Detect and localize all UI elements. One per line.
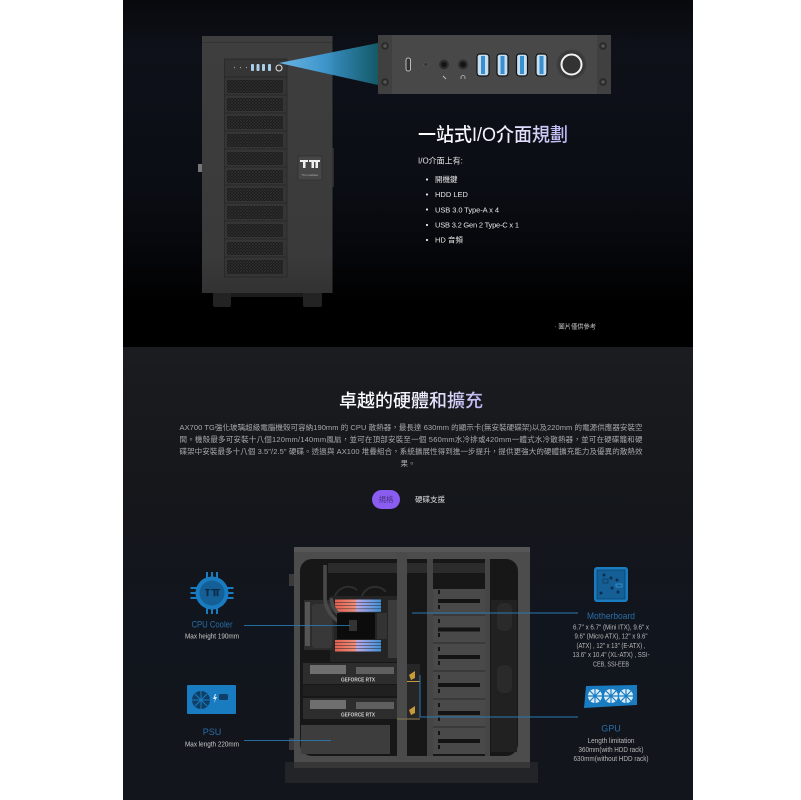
label: GPU specs: 360mm(with HDD rack) (578, 747, 644, 754)
text block: hardware description: 間。機殼最多可安裝十八個120mm/140mm風扇，並可在頂部安裝至一個 560mm水冷排或420mm一體式水冷散熱器，並可在硬碟籠和硬 (180, 434, 643, 444)
label: motherboard specs: CEB, SSI-EEB (593, 662, 629, 668)
heading: I/O section: 一站式I/O介面規劃 (418, 124, 568, 146)
icon: CPU cooler (190, 572, 234, 614)
label: PSU: PSU (203, 727, 221, 737)
coolant tubes (325, 565, 349, 628)
label: CPU cooler: CPU Cooler (192, 620, 233, 630)
text block: I/O list: I/O介面上有: (418, 156, 463, 166)
label: GPU specs: GPU (601, 724, 621, 734)
leader line: motherboard (412, 612, 578, 614)
text block: I/O list: HD 音頻 (435, 234, 463, 244)
label: GPU specs (574, 724, 648, 763)
label: PSU: Max length 220mm (185, 742, 239, 748)
I/O panel close-up (378, 35, 611, 94)
RAM bottom (335, 640, 381, 642)
label: GPU specs: Length limitation (588, 738, 635, 745)
icon: motherboard (594, 567, 628, 602)
HDD rack rails (427, 559, 433, 756)
case interior illustration (285, 547, 538, 783)
label: GPU specs: 630mm(without HDD rack) (574, 756, 648, 763)
label: PSU (185, 727, 239, 748)
icon: GPU (584, 685, 637, 708)
text block: I/O list: USB 3.0 Type-A x 4 (435, 206, 499, 214)
PSU (301, 725, 390, 754)
text block: I/O list: 開機鍵 (435, 174, 458, 184)
tab: specifications (active): 規格 (378, 494, 394, 504)
leader line: PSU (244, 740, 331, 742)
text block: I/O list: HDD LED (435, 190, 469, 199)
HDD sled stack (433, 589, 485, 754)
label: CPU cooler: Max height 190mm (185, 634, 239, 640)
text block: I/O list (418, 156, 519, 244)
text block: hardware description: AX700 TG強化玻璃超級電腦機殼可容納190mm 的 CPU 散熱器，最長達 630mm 的顯示卡(無安裝硬碟架)以及220mm 的電源供應器安裝空 (180, 422, 643, 432)
case interior illustration: GEFORCE RTX (341, 678, 375, 684)
label: motherboard specs: 13.6" x 10.4" (XL-ATX) , SSI- (572, 652, 650, 659)
label: motherboard specs: 6.7" x 6.7" (Mini ITX), 9.6" x (573, 624, 649, 632)
label: motherboard specs: Motherboard (587, 611, 635, 621)
top fans (335, 587, 386, 596)
label: motherboard specs: (ATX) , 12" x 13" (E-ATX) , (576, 643, 646, 650)
label: motherboard specs (572, 611, 650, 668)
RAM top (335, 600, 381, 602)
logo badge on tower (298, 156, 322, 180)
radiator fan (304, 600, 334, 650)
text block: hardware description (180, 422, 643, 468)
label: motherboard specs: 9.6" (Micro ATX), 12" x 9.6" (574, 634, 648, 640)
leader line: GPU (420, 675, 578, 717)
tab: specifications (active) (372, 490, 400, 509)
icon: PSU (187, 685, 236, 714)
panel: I/O section background (123, 0, 693, 347)
GPU 1 (303, 663, 397, 684)
text block: hardware description: 碟架中安裝最多十八個 3.5"/2.5" 硬碟。透過與 AX100 堆疊組合，系統擴展性得到進一步提升，提供更強大的硬體擴充能力及優異的散熱效 (180, 446, 643, 456)
text block: I/O list: USB 3.2 Gen 2 Type-C x 1 (435, 220, 519, 230)
motherboard (330, 596, 397, 662)
GPU bracket with gold accents (407, 664, 420, 720)
leader line: CPU cooler (244, 624, 350, 626)
CPU block (337, 613, 375, 639)
heading: hardware section: 卓越的硬體和擴充 (339, 391, 483, 411)
text block: hardware description: 果。 (400, 459, 416, 468)
case interior illustration: GEFORCE RTX (341, 712, 375, 718)
logo badge on tower: Thermaltake (302, 173, 319, 177)
panel: hardware section background (123, 347, 693, 800)
central pillar (397, 552, 407, 760)
GPU 2 (303, 698, 397, 719)
caption: image for reference: · 圖片僅供參考 (554, 322, 596, 330)
arrow: light cone from tower to I/O panel (279, 43, 378, 85)
tab: hard drive support: 硬碟支援 (415, 494, 445, 504)
label: CPU cooler (185, 620, 239, 640)
right side panel (491, 600, 517, 752)
tower case illustration (198, 36, 334, 307)
